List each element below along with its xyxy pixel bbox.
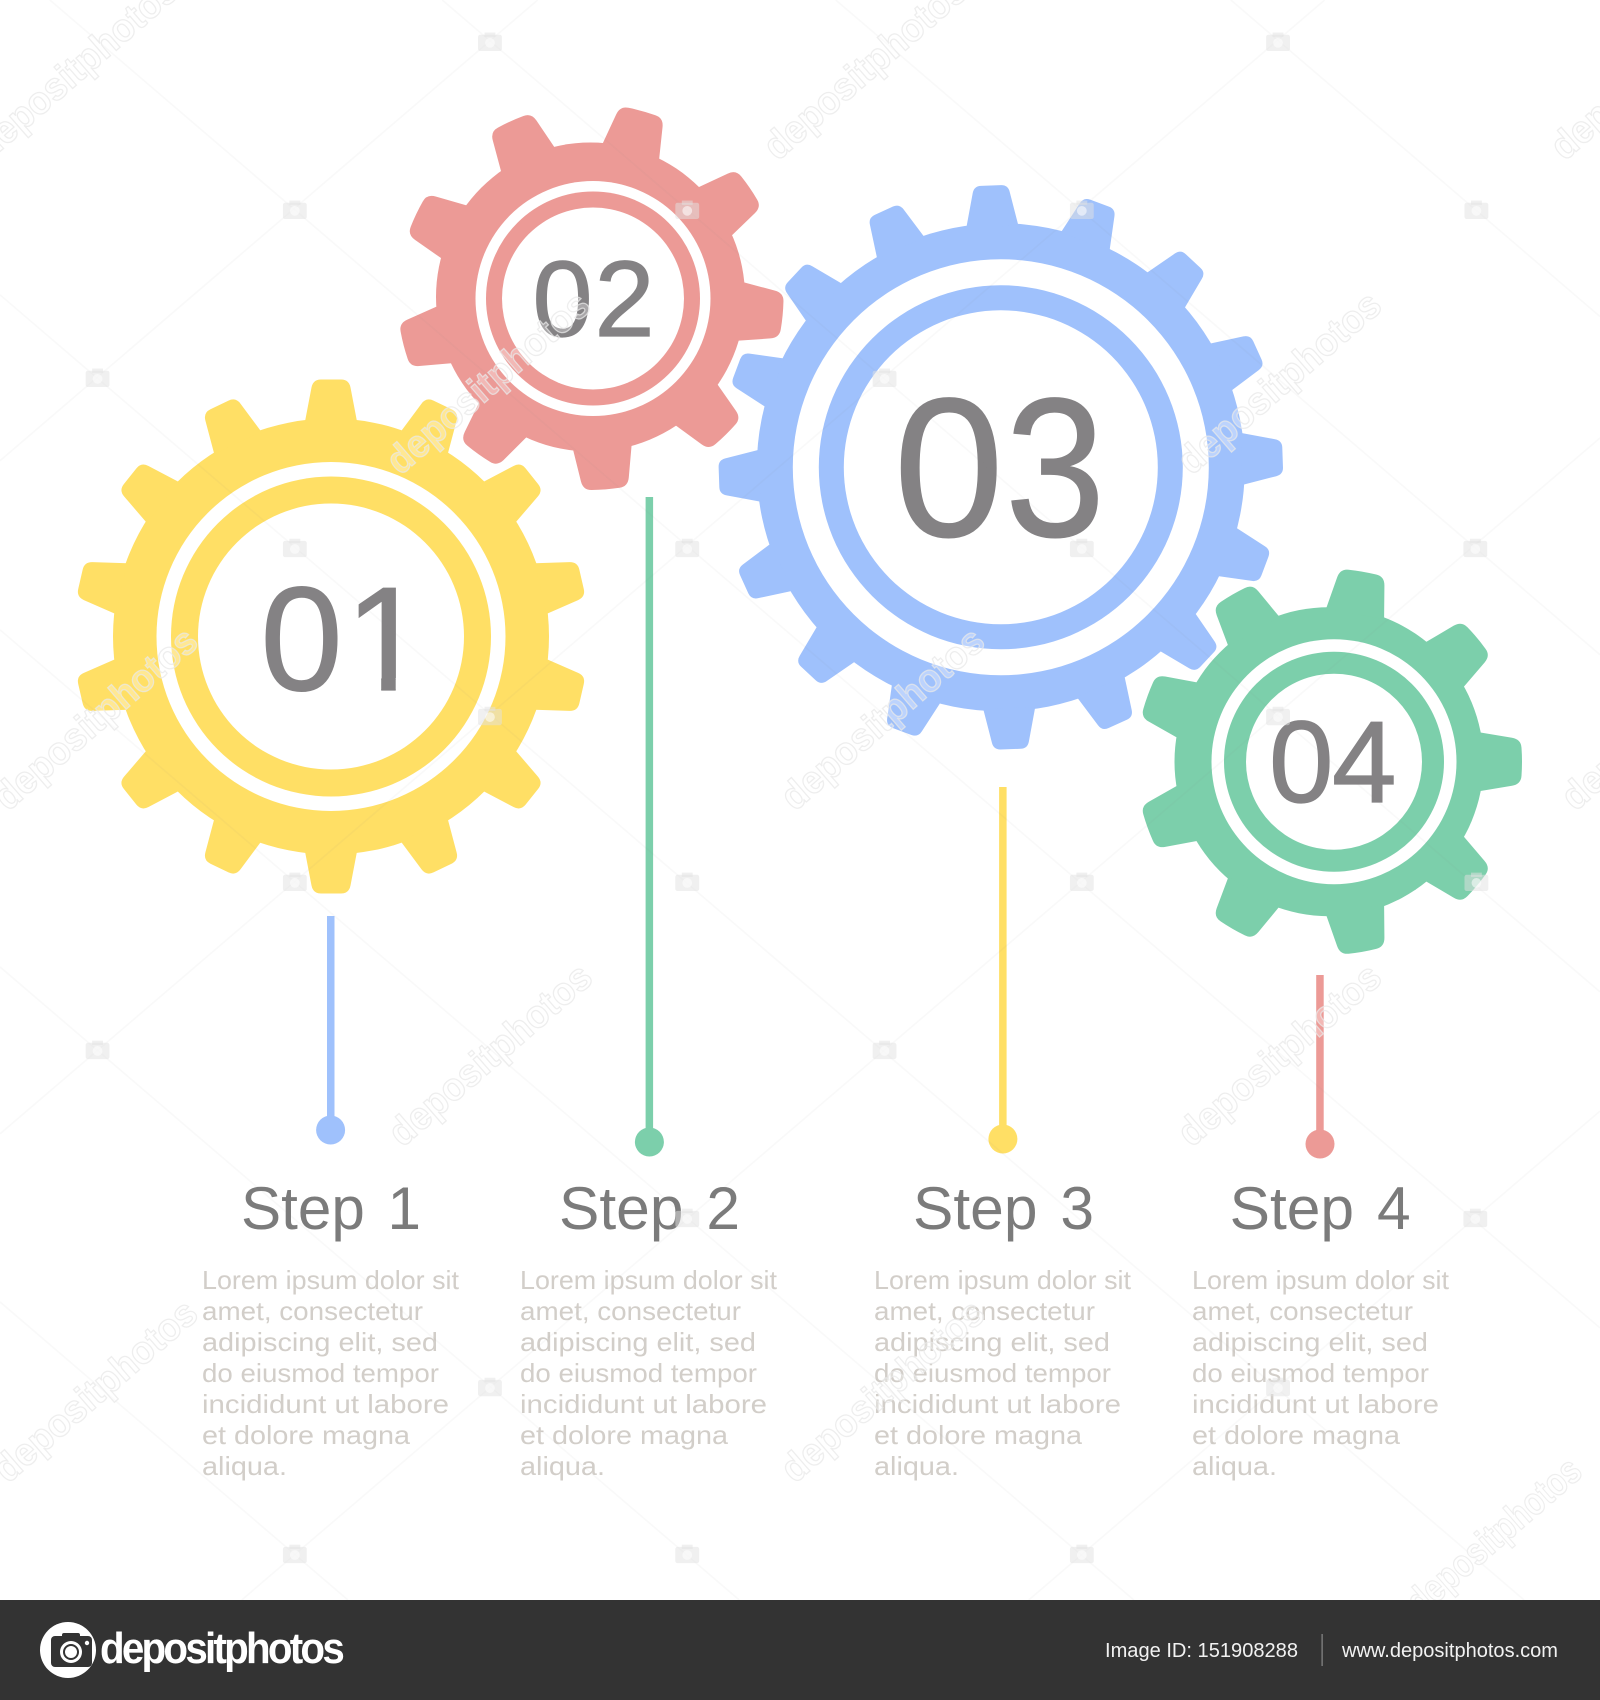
body: step 4: et dolore magna xyxy=(1192,1420,1401,1450)
watermark layer: depositphotos xyxy=(380,955,601,1155)
step 2 text xyxy=(520,1175,778,1481)
logo wordmark: depositphotos xyxy=(100,1624,343,1673)
body: step 2: Lorem ipsum dolor sit xyxy=(520,1265,778,1295)
body: step 4: aliqua. xyxy=(1192,1451,1277,1481)
body: step 3: adipiscing elit, sed xyxy=(874,1327,1110,1357)
gear 02: pink xyxy=(351,59,830,534)
heading: step 2: Step 2 xyxy=(559,1175,740,1242)
body: step 2: et dolore magna xyxy=(520,1420,729,1450)
body: step 1: Lorem ipsum dolor sit xyxy=(202,1265,460,1295)
image id: Image ID: 151908288 xyxy=(1105,1640,1298,1662)
gear 03: blue: 3 xyxy=(1005,358,1105,579)
body: step 2: do eiusmod tempor xyxy=(520,1358,757,1388)
body: step 1: aliqua. xyxy=(202,1451,287,1481)
body: step 3: amet, consectetur xyxy=(874,1296,1095,1326)
heading: step 3: Step 3 xyxy=(913,1175,1094,1242)
body: step 3: aliqua. xyxy=(874,1451,959,1481)
body: step 3: do eiusmod tempor xyxy=(874,1358,1111,1388)
body: step 2: aliqua. xyxy=(520,1451,605,1481)
body: step 3: incididunt ut labore xyxy=(874,1389,1121,1419)
watermark layer: depositphotos xyxy=(773,1291,993,1491)
watermark layer: depositphotos xyxy=(773,619,993,819)
connector: step 1 xyxy=(316,916,345,1144)
footer divider xyxy=(1322,1634,1323,1666)
body: step 1: do eiusmod tempor xyxy=(202,1358,439,1388)
body: step 1: incididunt ut labore xyxy=(202,1389,449,1419)
connector: step 3 xyxy=(988,787,1017,1154)
body: step 2: adipiscing elit, sed xyxy=(520,1327,756,1357)
body: step 4: adipiscing elit, sed xyxy=(1192,1327,1428,1357)
body: step 4: incididunt ut labore xyxy=(1192,1389,1439,1419)
body: step 3 xyxy=(874,1265,1132,1481)
connector: step 2 xyxy=(635,497,664,1156)
site url: www.depositphotos.com xyxy=(1341,1640,1558,1662)
body: step 4 xyxy=(1192,1265,1450,1481)
body: step 4: Lorem ipsum dolor sit xyxy=(1192,1265,1450,1295)
gear 04: green: 04 xyxy=(1269,697,1397,827)
body: step 1 xyxy=(202,1265,460,1481)
gear 01: yellow xyxy=(75,380,587,894)
gear 01: yellow: 0 xyxy=(260,557,343,722)
body: step 4: do eiusmod tempor xyxy=(1192,1358,1429,1388)
watermark layer: depositphotos xyxy=(1169,283,1390,483)
body: step 1: adipiscing elit, sed xyxy=(202,1327,438,1357)
body: step 2 xyxy=(520,1265,778,1481)
step 3 text xyxy=(874,1175,1132,1481)
gear 01: yellow: 1 xyxy=(345,557,427,722)
body: step 4: amet, consectetur xyxy=(1192,1296,1413,1326)
heading: step 4: Step 4 xyxy=(1230,1175,1411,1242)
step 4 text xyxy=(1192,1175,1450,1481)
body: step 2: amet, consectetur xyxy=(520,1296,741,1326)
icon: camera logo xyxy=(40,1622,96,1678)
gear 04: green xyxy=(1104,538,1555,984)
heading: step 1: Step 1 xyxy=(241,1175,421,1242)
watermark layer: depositphotos xyxy=(378,283,599,483)
gear 03: blue xyxy=(709,176,1292,759)
body: step 1: et dolore magna xyxy=(202,1420,411,1450)
body: step 2: incididunt ut labore xyxy=(520,1389,767,1419)
gear 02: pink: 02 xyxy=(532,238,655,359)
step 1 text xyxy=(202,1175,460,1481)
gear 03: blue: 0 xyxy=(894,357,1004,578)
footer bar xyxy=(0,1600,1600,1700)
body: step 3: et dolore magna xyxy=(874,1420,1083,1450)
watermark layer: depositphotos xyxy=(1169,955,1390,1155)
connector: step 4 xyxy=(1306,975,1334,1158)
body: step 1: amet, consectetur xyxy=(202,1296,423,1326)
body: step 3: Lorem ipsum dolor sit xyxy=(874,1265,1132,1295)
